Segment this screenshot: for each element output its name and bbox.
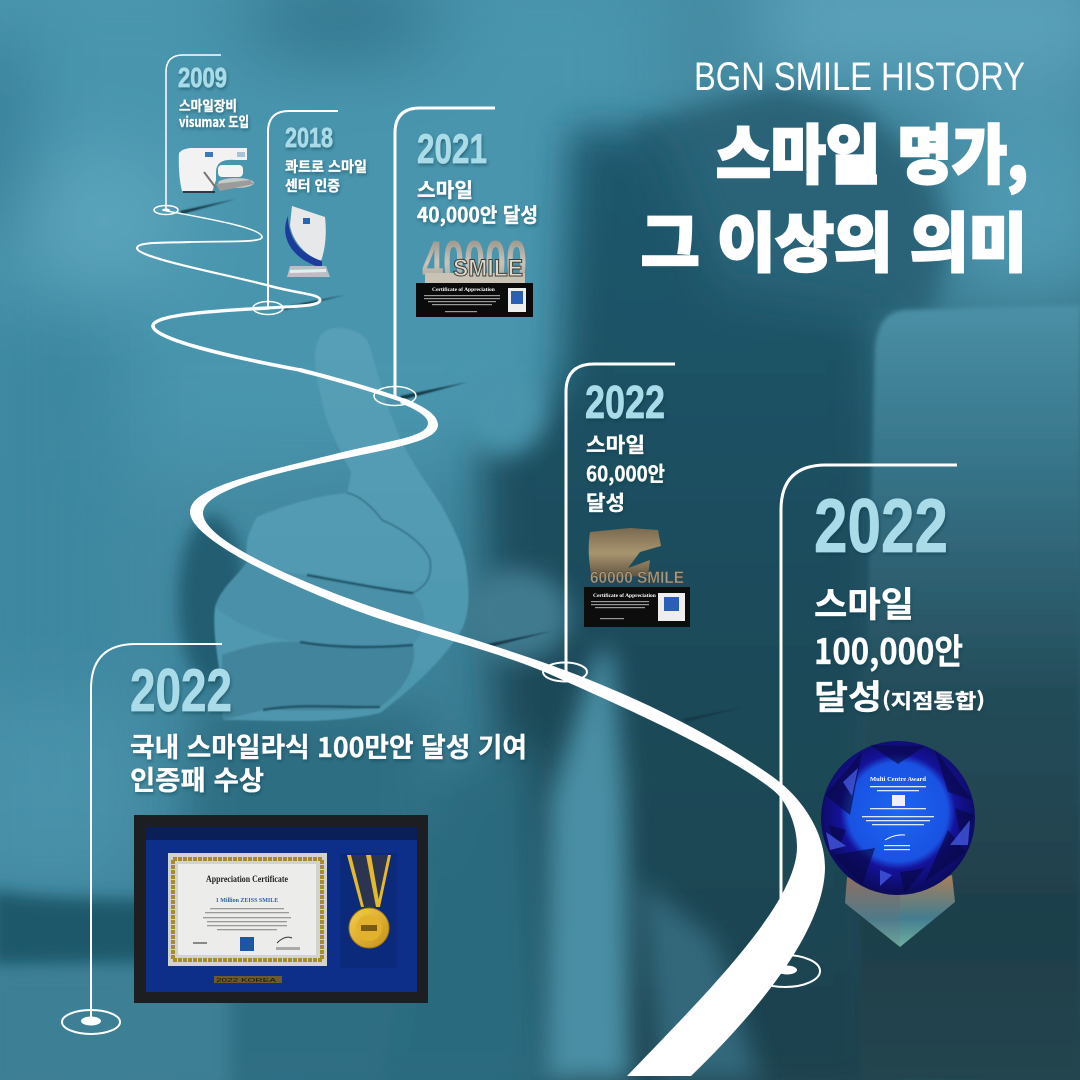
award: 40000 smile plaque: 40000: [422, 229, 527, 296]
year 2009: 2009: [178, 62, 227, 93]
milestone 2018: quattro smile center: [253, 111, 367, 314]
milestone 2022: 60,000 smile: [543, 364, 690, 682]
main title: [641, 105, 1028, 285]
year 2022 (1 million): 2022: [130, 657, 232, 724]
main title: 스마일 명가,: [716, 105, 1028, 197]
certificate: Appreciation Certificate: [206, 875, 288, 885]
dark shoulder behind title: [630, 85, 950, 320]
milestone 2009: smile equipment: [154, 55, 254, 214]
award: 60000 smile plaque: Certificate of Appreciation: [593, 593, 656, 599]
caption 100,000: 달성: [814, 670, 882, 719]
award: 60000 smile plaque: 60000 SMILE: [590, 568, 684, 587]
award: 60000 smile plaque: [584, 528, 690, 627]
award: 40000 smile plaque: SMILE: [453, 255, 523, 282]
award: blue crystal: [821, 741, 975, 947]
marker line 1 million: [62, 644, 222, 1034]
crystal disc: [821, 741, 975, 895]
caption 2018: [285, 156, 367, 196]
marker line 100,000: [750, 465, 957, 987]
caption 2009: [179, 96, 249, 132]
caption 1 million: 인증패 수상: [130, 759, 264, 798]
award: 40000 smile plaque: Certificate of Appreciation: [432, 287, 495, 293]
year 2018: 2018: [285, 122, 333, 153]
caption 60,000: 스마일: [586, 428, 645, 458]
caption 2021: 40,000안 달성: [417, 199, 538, 228]
year 2021: 2021: [417, 125, 487, 172]
caption 60,000: [586, 428, 665, 516]
icon: visumax machine: [179, 148, 254, 193]
pedestal: [845, 875, 955, 947]
milestone 2022: 1 million contribution: [62, 644, 527, 1034]
award: 40000 smile plaque: [416, 229, 533, 317]
medal: [347, 855, 391, 948]
icon: shield trophy: [285, 206, 330, 277]
certificate: [168, 853, 327, 966]
milestone 2022: 100,000 smile: [750, 465, 985, 987]
caption 2021: 스마일: [417, 174, 473, 203]
hand: [214, 328, 468, 721]
marker line 2009: [154, 55, 221, 214]
caption 2018: 센터 인증: [285, 175, 340, 196]
caption 2018: 콰트로 스마일: [285, 156, 367, 177]
nameplate: [214, 976, 282, 984]
caption 1 million: 국내 스마일라식 100만안 달성 기여: [130, 726, 527, 765]
dark body: [160, 125, 890, 1080]
caption 2009: 스마일장비: [179, 96, 237, 116]
title block: [641, 55, 1028, 285]
caption 2009: visumax 도입: [179, 112, 249, 132]
caption 100,000: 스마일: [814, 577, 914, 628]
caption 100,000: (지점통합): [882, 685, 985, 714]
caption 60,000: 달성: [586, 486, 625, 516]
main title: 그 이상의 의미: [641, 193, 1027, 285]
marker line 2021: [374, 108, 495, 406]
laptop screen: [860, 305, 1080, 1080]
caption 60,000: 60,000안: [586, 457, 665, 487]
timeline road: [137, 211, 825, 1076]
caption 100,000: 100,000안: [814, 624, 963, 675]
marker line 2018: [253, 111, 338, 314]
certificate: 1 Million ZEISS SMILE: [216, 898, 278, 904]
caption 1 million: [130, 726, 527, 798]
marker line 60,000: [543, 364, 675, 682]
nameplate: 2022 KOREA: [216, 978, 277, 984]
year 2022 (100,000): 2022: [814, 484, 948, 569]
caption 100,000: [814, 577, 985, 719]
crystal disc: Multi Centre Award: [870, 776, 926, 783]
caption 2021: [417, 174, 538, 228]
ring shadows: [180, 199, 744, 722]
year 2022 (60,000): 2022: [585, 376, 665, 428]
milestone 2021: 40,000 smile: [374, 108, 538, 406]
award: framed certificate and medal: [134, 815, 428, 1003]
